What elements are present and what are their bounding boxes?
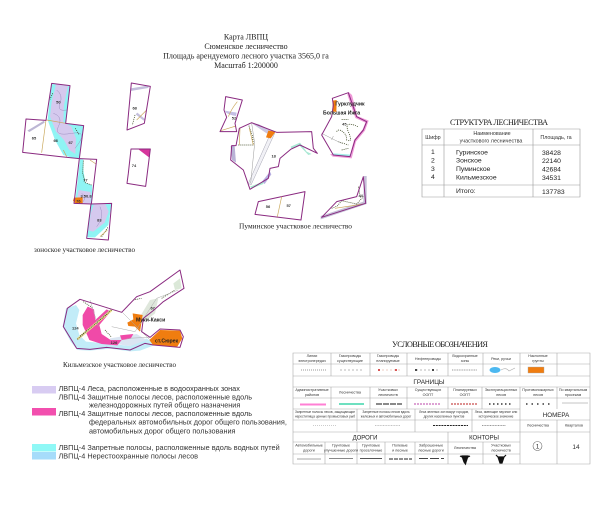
symbols row 2: лесов: [533, 393, 543, 397]
symbols row 5: Заброшенные: [419, 444, 443, 448]
symbols row 2: Участковых: [378, 388, 398, 392]
table: forestry structure: Гуринское: [456, 150, 488, 156]
pink protective zones: [83, 307, 133, 345]
symbols row 2: лесничеств: [378, 393, 398, 397]
title: [163, 32, 329, 70]
numbers cells: [527, 424, 583, 451]
symbols row 1: существующие: [337, 359, 363, 363]
parcel outlines: [23, 83, 150, 240]
table: forestry structure: 137783: [542, 189, 565, 196]
legend: LVPC categories: [32, 384, 287, 460]
symbols row 1: планируемые: [376, 359, 400, 363]
parcel numbers: 67: [68, 140, 74, 145]
symbols row 1: [298, 354, 548, 373]
parcel numbers: [32, 99, 138, 222]
numbers cells: Кварталов: [565, 424, 583, 428]
symbols row 1: Реки, ручьи: [491, 357, 511, 361]
heading: contours: КОНТОРЫ: [469, 436, 499, 442]
contours and roads: [77, 290, 178, 340]
legend text: ЛВПЦ-4 Нерестоохранные полосы лесов: [58, 452, 198, 460]
symbols row 5: и лесные: [392, 448, 408, 452]
symbols row 3: Запретные полосы лесов вдоль: [362, 410, 410, 414]
table: forestry structure: Итого:: [456, 188, 476, 195]
symbols row 5: Грунтовые: [332, 444, 350, 448]
heading: structure table: СТРУКТУРА ЛЕСНИЧЕСТВА: [450, 118, 548, 127]
place labels: [323, 101, 365, 117]
place labels: Гурклудчик: [335, 101, 365, 107]
table: forestry structure: Кильмезское: [456, 174, 497, 182]
river and protective strips: [27, 84, 150, 237]
orange plot: [73, 197, 83, 203]
parcel numbers: 76: [76, 198, 81, 203]
light green and grey land cover: [110, 278, 182, 346]
symbols row 2: ООПТ: [460, 393, 471, 397]
heading: legend: УСЛОВНЫЕ ОБОЗНАЧЕНИЯ: [392, 340, 488, 349]
symbols row 3: нерестилища ценных промысловых рыб: [295, 414, 355, 418]
parcel numbers: [72, 305, 156, 345]
title: Сюменское лесничество: [204, 42, 288, 51]
symbols row 2: Эксплуатационных: [485, 388, 517, 392]
symbols row 2: Противопожарных: [522, 388, 554, 392]
symbols row 1: Водоохранные: [452, 354, 478, 358]
legend text: федеральных автомобильных дорог общего пользования,: [89, 418, 287, 426]
parcel numbers: 68: [132, 105, 138, 110]
icon: district office: [496, 455, 506, 463]
symbols row 5: Грунтовые: [362, 444, 380, 448]
table: forestry structure: Пуминское: [456, 166, 491, 173]
table: forestry structure: 3: [431, 166, 435, 173]
pale river band: [63, 305, 155, 351]
symbols row 2: районов: [305, 393, 319, 397]
parcel numbers: 18: [271, 153, 277, 158]
grid: [293, 353, 590, 464]
table: forestry structure: 42684: [542, 166, 561, 174]
parcel numbers: 124: [72, 326, 79, 331]
label: Puminskoe: Пуминское участковое лесничество: [239, 222, 352, 230]
numbers cells: 14: [572, 444, 580, 451]
map: Puminskoe forestry: [220, 92, 369, 220]
legend text: ЛВПЦ-4 Защитные полосы лесов, расположенные вдоль: [58, 409, 252, 418]
forest contours: [221, 102, 363, 208]
symbols row 5: Лесничества: [454, 446, 477, 450]
symbols row 2: По квартальным: [559, 388, 588, 392]
numbers cells: Лесничества: [527, 424, 550, 428]
parcel numbers: 67: [150, 305, 156, 310]
symbols row 3: Леса зеленых зон вокруг городов,: [419, 410, 469, 414]
protective strips: [225, 92, 369, 219]
symbols row 2: лесов: [496, 393, 506, 397]
title: Площадь арендуемого лесного участка 3565,0 га: [163, 52, 329, 60]
parcel numbers: 50: [56, 99, 61, 104]
place labels: [136, 317, 179, 344]
parcel numbers: 3.50.8: [80, 193, 92, 198]
symbols row 3: [295, 410, 517, 426]
parcel numbers: 66: [53, 138, 59, 143]
map: Kilmezskoe forestry: [63, 270, 184, 351]
symbols row 1: Газопроводы: [339, 354, 361, 358]
forest outline: [63, 270, 184, 350]
table: forestry structure: Зонское: [456, 158, 482, 164]
parcel numbers: 56: [266, 204, 271, 209]
symbols row 5: Участковых: [491, 444, 511, 448]
numbers cells: 1: [536, 444, 540, 450]
symbols row 5: Автомобильные: [295, 444, 323, 448]
legend text: ЛВПЦ-4 Леса, расположенные в водоохранных зонах: [58, 384, 240, 393]
parcel numbers: 83: [97, 217, 102, 222]
parcel numbers: 45: [342, 122, 347, 127]
symbols row 5: Полевые: [392, 444, 408, 448]
symbols row 2: Лесничества: [339, 390, 362, 394]
legend table: map symbols: [293, 353, 590, 464]
parcel numbers: 65: [32, 136, 37, 141]
symbols row 2: Административные: [295, 388, 329, 392]
swatch: road strips: [32, 408, 56, 416]
place labels: ст.Сюрек: [155, 338, 179, 344]
label: Kilmezskoe: Кильмезское участковое лесничество: [63, 361, 176, 369]
table: forestry structure: Шифр: [425, 135, 441, 141]
symbols row 2: Существующих: [415, 388, 441, 392]
parcel numbers: 44: [358, 193, 364, 198]
heading: roads: ДОРОГИ: [353, 436, 377, 442]
parcel numbers: 126: [111, 340, 118, 345]
parcel numbers: 57: [286, 203, 292, 208]
symbols row 5: лесничеств: [491, 448, 511, 452]
place labels: Муки-Какси: [136, 317, 165, 323]
title: Масштаб 1:200000: [214, 61, 278, 70]
parcel outlines: [220, 93, 367, 220]
symbols row 5: улучшенные дороги: [324, 448, 358, 452]
symbols row 5: проселочные: [360, 448, 382, 452]
symbols row 2: ООПТ: [423, 393, 434, 397]
table: forestry structure: 4: [431, 174, 435, 181]
symbols row 3: Запретные полосы лесов, защищающие: [295, 410, 355, 414]
symbols row 5: дороги: [303, 448, 315, 452]
table: forestry structure: 2: [431, 158, 435, 164]
symbols row 3: железных и автомобильных дорог: [361, 414, 412, 418]
parcel numbers: 74: [132, 163, 137, 168]
table: forestry structure: участкового лесничества: [460, 138, 522, 144]
orange plots: [266, 100, 337, 138]
parcel numbers: 52: [232, 115, 237, 120]
table: forestry structure: Наименование: [473, 131, 511, 137]
legend text: [58, 384, 287, 460]
title: Карта ЛВПЦ: [224, 32, 268, 42]
symbols row 2: Планируемых: [453, 388, 477, 392]
symbols row 2: просекам: [565, 393, 582, 397]
symbols row 3: других населенных пунктов: [424, 414, 465, 418]
symbols row 1: Линии: [307, 354, 317, 358]
forest contours: [42, 93, 147, 237]
heading: borders: ГРАНИЦЫ: [413, 379, 445, 386]
symbols row 1: Наклонные: [528, 354, 548, 358]
parcel numbers: 77: [83, 177, 88, 182]
symbols row 1: Газопроводы: [377, 354, 399, 358]
legend text: железнодорожных путей общего назначения: [89, 400, 240, 410]
orange plots and settlements: [127, 313, 182, 347]
swatch: forbidden strips: [32, 444, 56, 452]
symbols row 3: Леса, имеющие научное или: [475, 410, 517, 414]
symbols row 1: Нефтепроводы: [415, 357, 441, 361]
legend text: автомобильных дорог общего пользования: [89, 426, 236, 436]
legend text: ЛВПЦ-4 Запретные полосы, расположенные вдоль водных путей: [58, 443, 280, 452]
place labels: Большая Ижга: [323, 111, 360, 117]
table: forestry structure: 22140: [542, 158, 561, 165]
symbols row 1: зоны: [461, 359, 470, 363]
swatch: water protection: [32, 386, 56, 394]
map: Zonskoe forestry: [23, 83, 150, 240]
table: forestry structure: [422, 129, 580, 197]
legend text: ЛВПЦ-4 Защитные полосы лесов, расположенные вдоль: [58, 392, 252, 402]
table: forestry structure: 34531: [542, 175, 561, 182]
symbols row 1: грунты: [532, 359, 544, 363]
swatch: spawning strips: [32, 452, 56, 460]
symbols row 2: [295, 388, 588, 404]
symbols row 5: [295, 444, 511, 459]
table: forestry structure: Площадь, га: [540, 135, 572, 141]
table: forestry structure: 38428: [542, 150, 561, 157]
icon: forestry office: [460, 456, 470, 464]
symbols row 5: лесные дороги: [418, 448, 444, 452]
table: forestry structure: 1: [431, 149, 435, 156]
label: Zonskoe: зоноское участковое лесничество: [34, 246, 135, 254]
heading: numbers: НОМЕРА: [543, 412, 570, 419]
symbols row 1: электропередач: [298, 359, 326, 363]
symbols row 3: историческое значение: [479, 414, 514, 418]
parcel numbers: [232, 115, 364, 209]
